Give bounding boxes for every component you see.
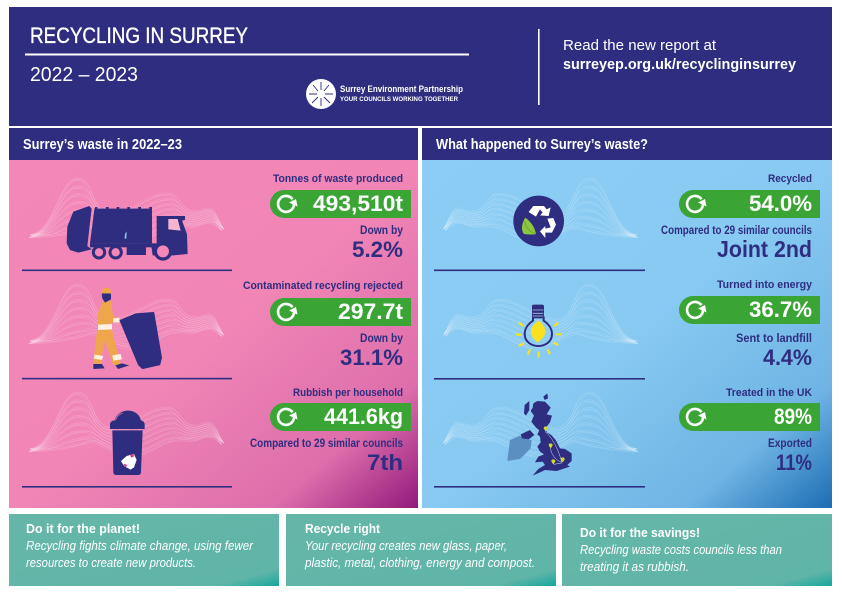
stat: turned into energy: 4.4%: [763, 345, 812, 370]
icon: worker with wheelie bin: [93, 288, 161, 369]
stat: tonnes of waste: Down by: [360, 223, 403, 237]
card: do it for the savings: [562, 514, 832, 586]
logo: Surrey Environment Partnership: [306, 79, 463, 109]
card: do it for the savings: treating it as rubbish.: [580, 560, 689, 574]
report link: [563, 37, 797, 73]
icon: recycling symbol with leaf: [513, 196, 564, 246]
card: do it for the planet: [9, 514, 279, 586]
panel heading: What happened to Surrey’s waste?: [436, 136, 648, 153]
report link: surreyep.org.uk/recyclinginsurrey: [563, 56, 797, 73]
stat: turned into energy: [679, 279, 820, 370]
stat: treated in the UK: 89%: [774, 404, 812, 429]
card: recycle right: Your recycling creates new glass, paper,: [305, 539, 507, 553]
icon: refuse truck: [67, 206, 188, 259]
stat: rubbish per household: Compared to 29 similar councils: [250, 438, 403, 450]
stat: rubbish per household: [250, 387, 411, 475]
card: recycle right: Recycle right: [305, 521, 381, 536]
stat: treated in the UK: Exported: [768, 436, 812, 450]
stat: recycled: [661, 173, 820, 262]
icon: map of UK: [507, 393, 572, 476]
stat: rubbish per household: 441.6kg: [324, 404, 403, 429]
panel heading: Surrey’s waste in 2022–23: [23, 136, 182, 153]
stat: tonnes of waste: 5.2%: [352, 237, 403, 262]
stat: contaminated recycling: Down by: [360, 331, 403, 345]
card: do it for the planet: resources to create new products.: [26, 556, 196, 570]
card: do it for the planet: Do it for the planet!: [26, 521, 140, 536]
stat: contaminated recycling: 31.1%: [340, 345, 403, 370]
stat: contaminated recycling: 297.7t: [338, 299, 404, 324]
card: do it for the savings: Recycling waste costs councils less than: [580, 543, 782, 557]
stat: turned into energy: 36.7%: [749, 297, 812, 322]
report link: Read the new report at: [563, 37, 717, 54]
card: recycle right: [286, 514, 556, 586]
icon: rubbish bin: [110, 411, 145, 475]
date range: 2022 – 2023: [30, 64, 138, 86]
panel: Surrey's waste: [9, 128, 418, 508]
stat: treated in the UK: [679, 387, 820, 475]
stat: contaminated recycling: [243, 280, 411, 370]
stat: rubbish per household: 7th: [367, 450, 403, 475]
card: do it for the savings: Do it for the savings!: [580, 525, 700, 540]
stat: turned into energy: Sent to landfill: [736, 331, 812, 345]
panel: what happened to Surrey's waste: [422, 128, 832, 508]
card: recycle right: plastic, metal, clothing, energy and compost.: [304, 556, 535, 570]
stat: contaminated recycling: Contaminated recycling rejected: [243, 280, 403, 292]
stat: recycled: Recycled: [768, 173, 812, 185]
logo: Surrey Environment Partnership: Surrey Environment Partnership: [340, 84, 463, 94]
icon: light bulb: [516, 305, 561, 357]
stat: treated in the UK: 11%: [776, 450, 812, 475]
stat: turned into energy: Turned into energy: [717, 279, 813, 291]
card: do it for the planet: Recycling fights climate change, using fewer: [26, 539, 254, 553]
stat: recycled: Compared to 29 similar councils: [661, 225, 812, 237]
stat: recycled: 54.0%: [749, 191, 812, 216]
header banner: [9, 7, 832, 126]
stat: treated in the UK: Treated in the UK: [726, 387, 812, 399]
stat: recycled: Joint 2nd: [717, 236, 812, 262]
stat: tonnes of waste: [270, 173, 411, 262]
stat: tonnes of waste: 493,510t: [313, 191, 404, 216]
logo: Surrey Environment Partnership: YOUR COUNCILS WORKING TOGETHER: [340, 97, 459, 103]
stat: tonnes of waste: Tonnes of waste produced: [273, 173, 403, 185]
title: RECYCLING IN SURREY: [30, 23, 248, 48]
stat: rubbish per household: Rubbish per household: [293, 387, 403, 399]
